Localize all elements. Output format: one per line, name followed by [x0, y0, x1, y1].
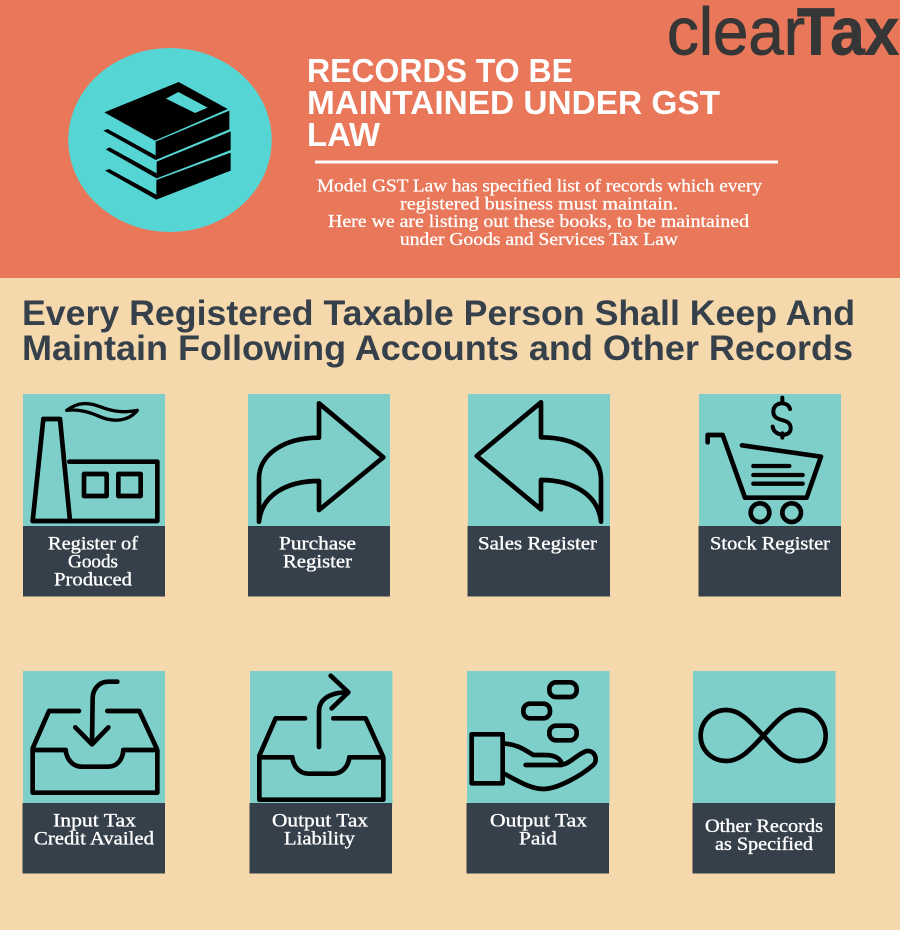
label: Input Tax: [53, 812, 137, 832]
label: Produced: [54, 570, 133, 590]
icon: shopping cart with dollar: [708, 398, 821, 522]
card: stock register: [698, 394, 841, 596]
icon: factory: [33, 404, 157, 521]
title: LAW: [307, 116, 381, 153]
icon: hand with coins: [472, 682, 596, 789]
section heading: [22, 294, 855, 368]
title: [307, 52, 720, 153]
header banner: [0, 0, 900, 278]
icon: right arrow: [259, 403, 383, 522]
label: Paid: [519, 830, 558, 850]
intro text: Here we are listing out these books, to be maintained: [328, 211, 749, 231]
icon: infinity: [701, 710, 826, 761]
icon: inbox with down arrow: [33, 682, 157, 793]
label: Credit Availed: [34, 830, 155, 850]
label: [490, 812, 588, 850]
label: Liability: [284, 830, 356, 850]
section heading: Maintain Following Accounts and Other Records: [22, 329, 853, 368]
card: output tax paid: [466, 671, 610, 874]
card: sales register: [468, 394, 610, 596]
label: as Specified: [715, 835, 814, 855]
label: [48, 534, 139, 590]
label: Purchase: [279, 534, 356, 554]
intro text: Model GST Law has specified list of records which every: [317, 176, 762, 196]
label: Sales Register: [478, 534, 597, 554]
label: [705, 817, 823, 855]
label: Register of: [48, 534, 139, 554]
card: input tax credit availed: [22, 671, 165, 874]
label: Output Tax: [272, 812, 369, 832]
label: [34, 812, 155, 850]
label: Other Records: [705, 817, 823, 837]
section heading: Every Registered Taxable Person Shall Keep And: [22, 294, 855, 333]
card: purchase register: [248, 394, 390, 596]
icon: outbox with up arrow: [259, 676, 383, 800]
title: RECORDS TO BE: [307, 52, 573, 89]
intro text: under Goods and Services Tax Law: [400, 229, 678, 249]
label: [279, 534, 356, 572]
label: Output Tax: [490, 812, 588, 832]
label: Stock Register: [710, 534, 830, 554]
label: [272, 812, 369, 850]
title: MAINTAINED UNDER GST: [307, 84, 720, 121]
icon: left arrow: [477, 402, 601, 522]
intro text: [317, 176, 762, 249]
card: other records as specified: [692, 671, 836, 874]
card: register of goods produced: [23, 394, 165, 596]
logo: clearTax: [667, 0, 899, 70]
icon: stack of books in circle: [68, 48, 272, 232]
card: output tax liability: [250, 671, 392, 874]
label: Goods: [68, 552, 118, 572]
label: Register: [283, 552, 352, 572]
intro text: registered business must maintain.: [400, 194, 678, 214]
